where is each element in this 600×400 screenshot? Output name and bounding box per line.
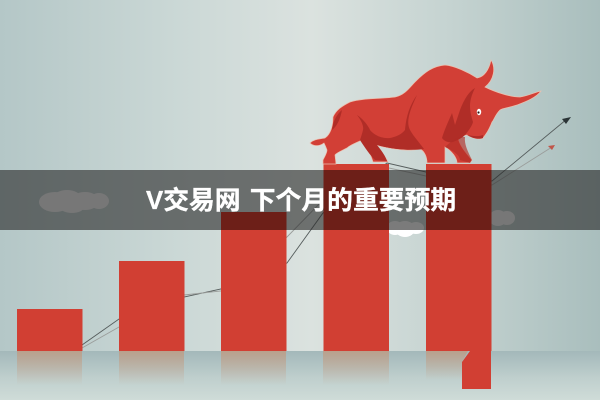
dark caption band — [0, 170, 600, 230]
bar 5 — [426, 164, 492, 351]
bar 3 — [221, 212, 286, 351]
floor — [0, 351, 600, 400]
bar 1 — [17, 309, 82, 351]
icon: red bull — [310, 60, 541, 164]
clouds — [39, 190, 515, 237]
title: V交易网 下个月的重要预期 — [146, 187, 456, 215]
bar tops inside band — [221, 170, 492, 230]
arrowhead: red — [548, 145, 555, 150]
bar reflections — [17, 351, 468, 385]
bull eye — [477, 109, 481, 115]
bull shading — [332, 88, 483, 163]
arrowhead: dark — [562, 117, 571, 124]
falling bar segment — [462, 351, 491, 389]
bull body — [310, 60, 541, 164]
bar 2 — [119, 261, 184, 351]
trend lines with arrows — [82, 117, 571, 348]
bar 4 — [324, 164, 389, 351]
bar chart — [17, 164, 492, 389]
